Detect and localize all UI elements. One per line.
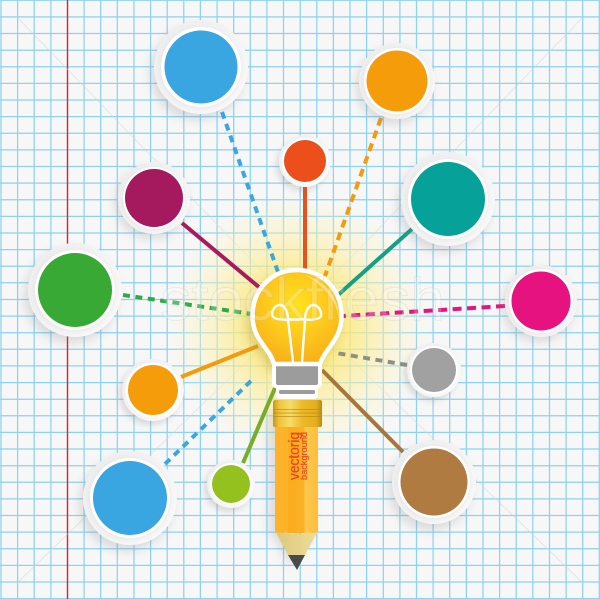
circle: blue low	[79, 451, 177, 551]
line: blue top dashed	[222, 112, 278, 272]
pencil label: background: background	[299, 432, 309, 480]
circle: orange low	[119, 359, 184, 425]
filament	[272, 305, 321, 362]
circle: orange top	[356, 43, 435, 124]
light bulb	[246, 270, 342, 399]
pencil ferrule	[273, 400, 322, 427]
circle: red	[276, 135, 331, 191]
pencil label: vectorig: vectorig	[287, 432, 303, 480]
circle: lime	[204, 460, 255, 512]
bulb highlight	[305, 275, 339, 320]
line: green dashed	[123, 295, 252, 314]
pencil	[268, 400, 322, 570]
line: orange top dashed	[325, 118, 381, 276]
bulb screw stripe	[279, 390, 315, 394]
bulb shadow	[246, 275, 340, 371]
pencil body	[275, 425, 318, 533]
circle: magenta	[502, 265, 577, 342]
circle: blue top	[150, 20, 248, 120]
circle: green	[24, 243, 122, 343]
ferrule ridges	[273, 410, 322, 416]
pencil lead	[288, 555, 305, 570]
bulb screw gray	[276, 366, 318, 385]
circle: purple	[115, 162, 190, 239]
line: brown	[322, 370, 403, 452]
circle: teal	[397, 152, 495, 252]
connector lines	[123, 112, 505, 464]
yellow glow	[166, 193, 430, 457]
line: lime	[243, 388, 275, 463]
line: teal	[338, 229, 412, 295]
line: blue low dashed	[165, 378, 254, 464]
circle: brown	[388, 440, 476, 530]
line: gray dashed	[336, 353, 407, 365]
bulb base collar	[272, 364, 322, 399]
margin line	[67, 0, 68, 599]
line: magenta dashed	[343, 306, 505, 316]
line: purple	[182, 223, 260, 288]
bulb glass	[252, 270, 342, 364]
circle: gray	[404, 343, 461, 401]
watermark: stockfresh	[160, 266, 445, 333]
pencil wood tip	[275, 531, 318, 555]
pencil shadow	[268, 410, 312, 566]
line: orange low	[181, 346, 258, 377]
line: red	[303, 186, 307, 270]
